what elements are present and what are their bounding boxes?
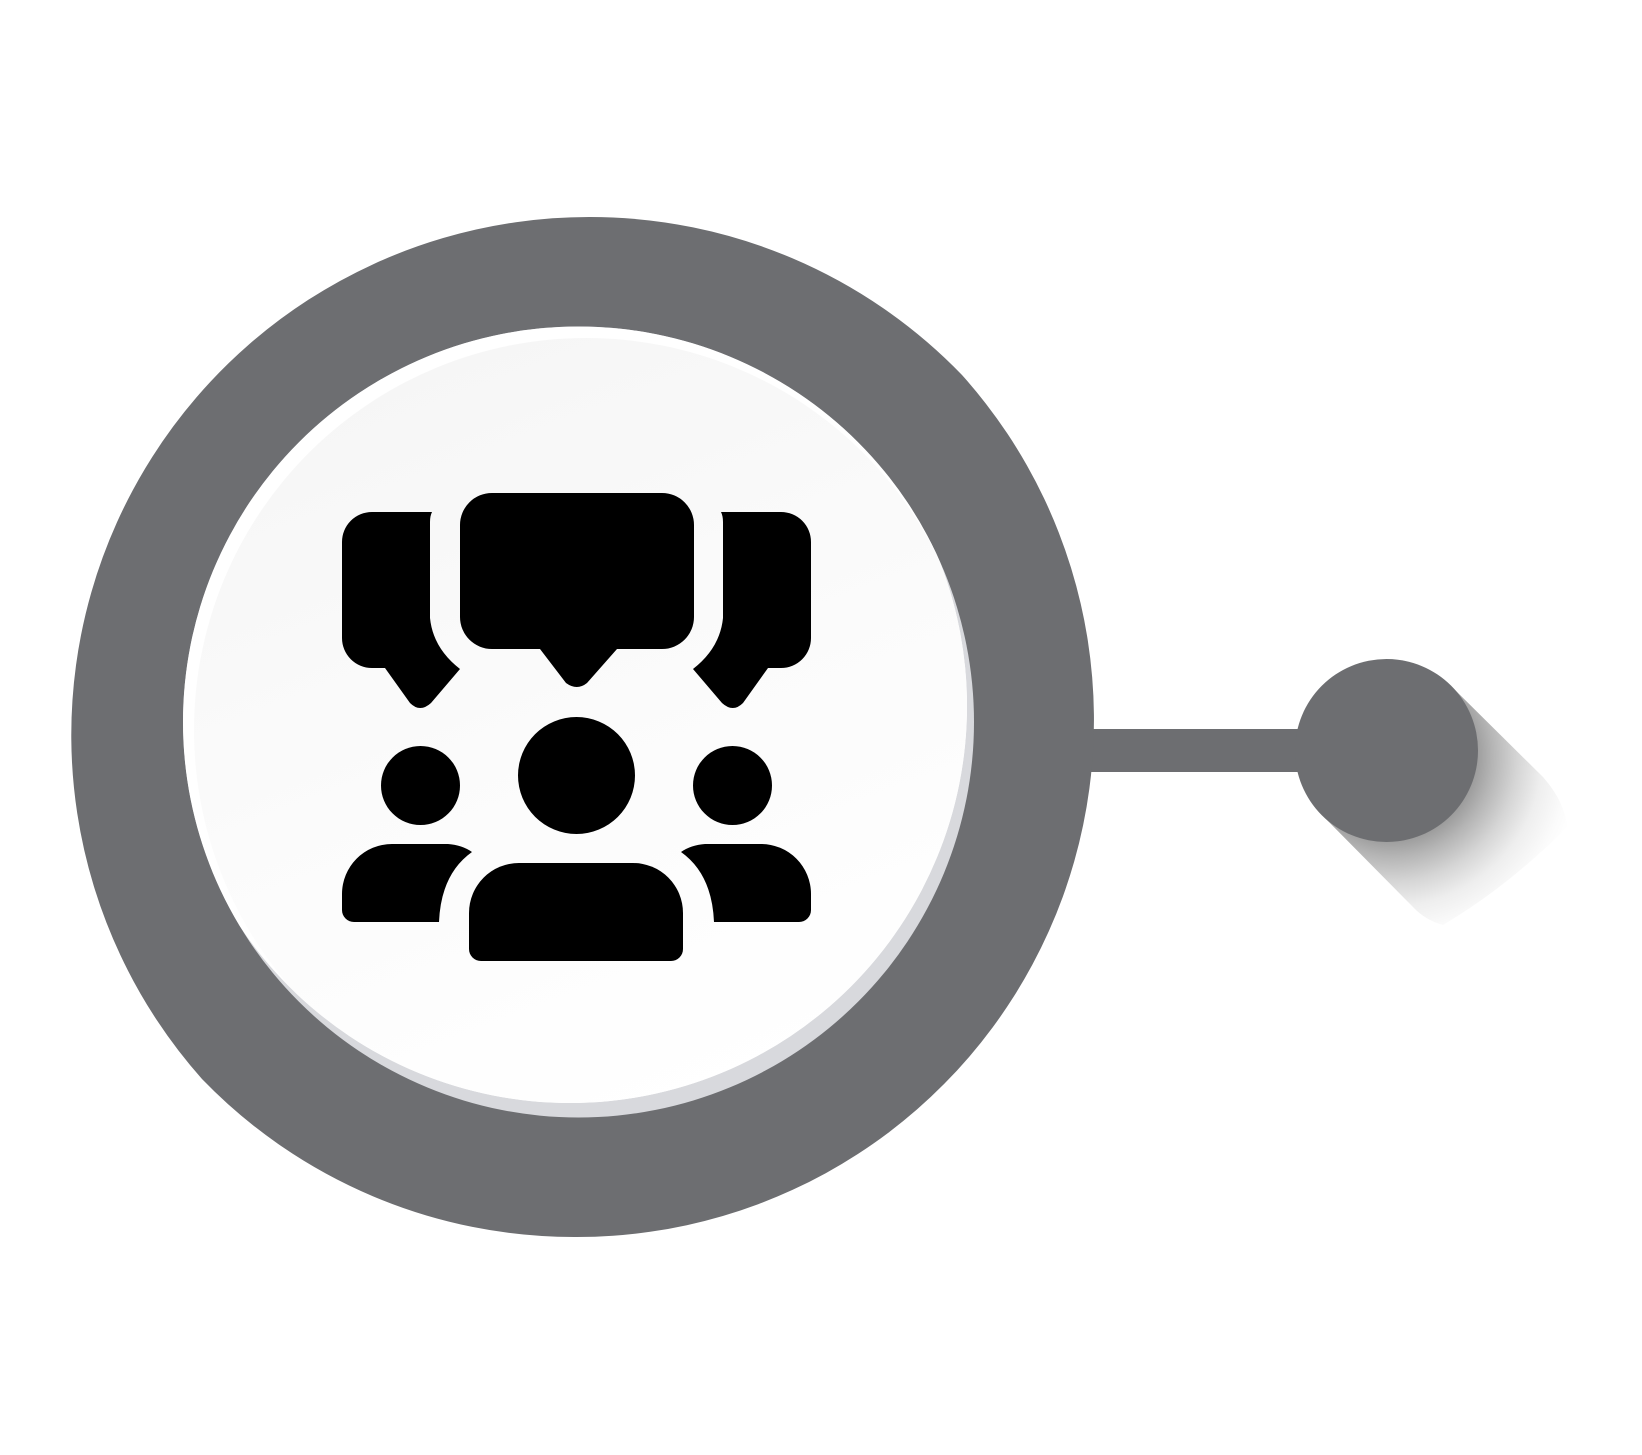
icon: centre person body — [469, 863, 683, 961]
icon: people talking — [342, 493, 811, 961]
disc lower crescent — [183, 326, 974, 1118]
icon: left person head — [381, 746, 460, 825]
icon: left speech bubble — [342, 512, 460, 708]
connector bar — [1085, 729, 1305, 772]
icon: right person body — [681, 844, 811, 922]
icon: right speech bubble — [693, 512, 811, 708]
long shadow of small node — [1322, 686, 1567, 925]
icon: left person body — [342, 844, 472, 922]
disc white rim and face — [173, 309, 978, 1122]
inner disc — [173, 309, 978, 1122]
icon: centre speech bubble — [460, 493, 694, 687]
small node circle — [1295, 659, 1478, 842]
infographic: group discussion badge — [71, 217, 1556, 1237]
icon: right person head — [693, 746, 772, 825]
outer ring — [71, 217, 1094, 1237]
icon: centre person head — [518, 717, 635, 834]
